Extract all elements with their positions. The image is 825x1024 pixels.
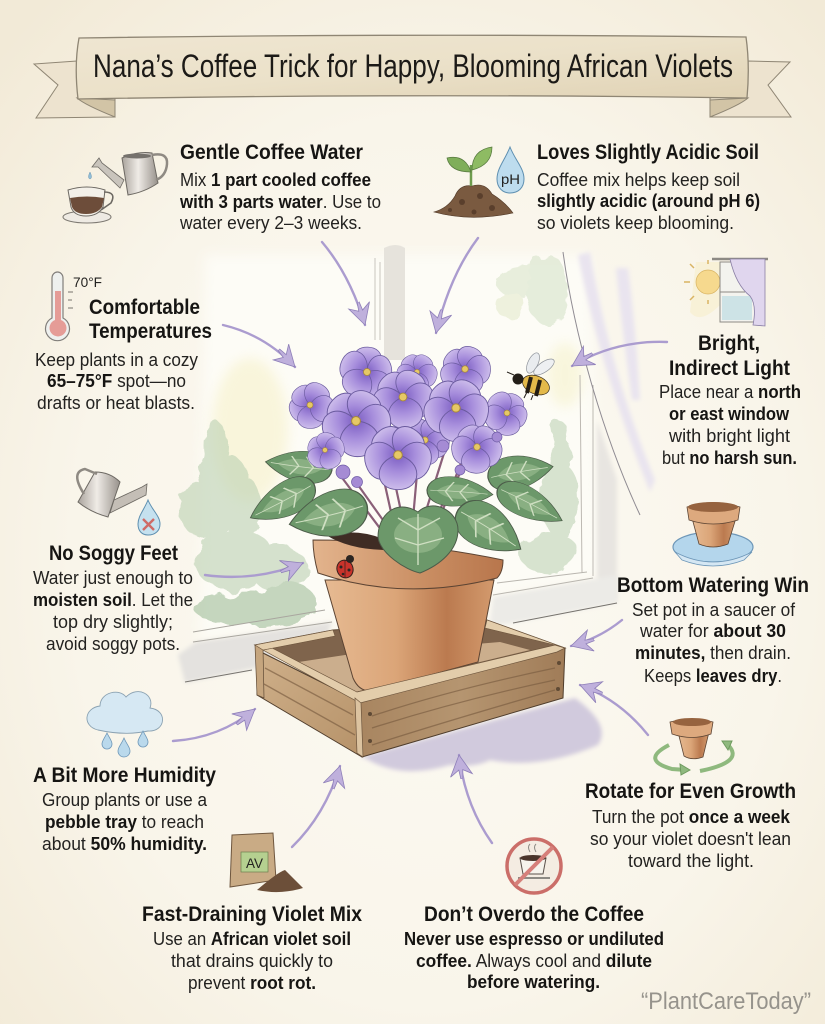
foliage outside right [495,254,578,572]
window frame [384,245,405,360]
text: Place near a north [659,382,801,402]
text: Water just enough to [33,568,193,588]
panel: acidic soil [434,141,760,233]
sill left [178,622,332,683]
text: top dry slightly; [53,612,173,632]
text: but no harsh sun. [662,448,797,468]
text: Coffee mix helps keep soil [537,170,740,190]
illustration: stems [340,440,470,535]
illustration: wooden tray front [255,620,565,757]
illustration: leaves [243,446,569,573]
illustration: wooden tray back [255,620,565,703]
heading: Gentle Coffee Water [180,141,363,164]
text [35,350,198,413]
text [590,807,791,871]
text: 65–75°F spot—no [47,371,186,391]
arrow: acidic soil [436,238,478,333]
arrow: humidity [173,709,255,741]
text [179,170,381,233]
text [632,600,796,686]
panel: gentle coffee water [63,141,381,233]
panel: soggy feet [33,469,193,654]
heading: Fast-Draining Violet Mix [142,903,362,926]
icon: seedling with pH drop: pH [501,171,520,187]
panel: soil mix [142,833,362,993]
heading: Bright, [698,332,760,355]
heart leaf [378,506,458,573]
illustration: terracotta pot [313,532,503,691]
text: minutes, then drain. [635,643,791,663]
icon: rain cloud [87,692,163,757]
arrow: soil mix [292,766,340,847]
panel: temperatures [35,272,212,413]
text: toward the light. [628,851,754,871]
text: that drains quickly to [171,951,333,971]
arrow: bottom watering [571,620,622,646]
illustration: window scene [178,245,655,771]
sill right [490,575,617,626]
icon: no coffee sign [507,839,561,893]
icon: soil bag: AV [246,855,264,871]
panel: humidity [33,692,216,854]
heading: Bottom Watering Win [617,574,809,597]
text: before watering. [467,972,600,992]
text: Never use espresso or undiluted [404,929,664,949]
tray shadow [360,698,602,771]
arrow: rotate [580,685,648,735]
icon: sunny window [684,259,768,326]
text: Set pot in a saucer of [632,600,796,620]
text [537,170,760,233]
text: drafts or heat blasts. [37,393,195,413]
text [42,790,208,854]
icon: thermometer: 70°F [73,274,102,290]
panel: bottom watering [617,502,809,686]
text: slightly acidic (around pH 6) [537,191,760,211]
text: so your violet doesn't lean [590,829,791,849]
heading [89,296,212,343]
arrow: overdo [459,755,492,843]
heading: No Soggy Feet [49,542,178,565]
panel: bright light [659,259,801,468]
text: prevent root rot. [188,973,316,993]
text: water every 2–3 weeks. [179,213,362,233]
illustration: violet flowers [280,331,537,490]
text: or east window [669,404,790,424]
arrow: soggy feet [205,563,303,577]
text: with bright light [668,426,790,446]
illustration: ladybug [334,555,356,580]
text [153,929,351,993]
panel: overdo coffee [404,839,664,992]
banner right tail [710,61,791,117]
banner body [76,35,748,99]
text: Keep plants in a cozy [35,350,198,370]
icon: seedling with pH drop [434,147,524,217]
icon: thermometer [46,272,102,341]
foliage outside left [179,421,315,626]
heading: Comfortable [89,296,200,319]
text: Turn the pot once a week [592,807,791,827]
text [33,568,193,654]
heading: A Bit More Humidity [33,764,216,787]
heading: Temperatures [89,320,212,343]
text: pebble tray to reach [45,812,204,832]
text: Mix 1 part cooled coffee [180,170,371,190]
heading: Loves Slightly Acidic Soil [537,141,759,164]
window glass [200,255,600,640]
heading [669,332,790,380]
icon: watering can with crossed drop [77,469,160,535]
heading: Don’t Overdo the Coffee [424,903,644,926]
arrow: light [572,342,667,366]
text: Use an African violet soil [153,929,351,949]
curtain [578,252,655,492]
soil [326,532,388,550]
text: Group plants or use a [42,790,208,810]
heading: Rotate for Even Growth [585,780,796,803]
illustration: bee [507,351,557,400]
text: Keeps leaves dry. [644,666,782,686]
text: coffee. Always cool and dilute [416,951,652,971]
text: water for about 30 [639,621,786,641]
text: about 50% humidity. [42,834,207,854]
panel: rotate [585,718,796,871]
text: avoid soggy pots. [46,634,180,654]
text [659,382,801,468]
text: with 3 parts water. Use to [179,192,381,212]
arrow: coffee water [322,242,365,325]
arrows [173,238,667,847]
text: so violets keep blooming. [537,213,734,233]
title banner [34,35,791,118]
text: moisten soil. Let the [33,590,193,610]
icon: soil bag [230,833,303,892]
heading: Indirect Light [669,357,790,380]
icon: rotating pot [655,718,733,775]
text [404,929,664,992]
icon: watering can and cup [63,153,167,223]
watermark: “PlantCareToday” [641,988,811,1015]
banner left tail [34,61,115,118]
arrow: temperatures [223,325,295,367]
icon: pot in saucer [673,502,753,566]
